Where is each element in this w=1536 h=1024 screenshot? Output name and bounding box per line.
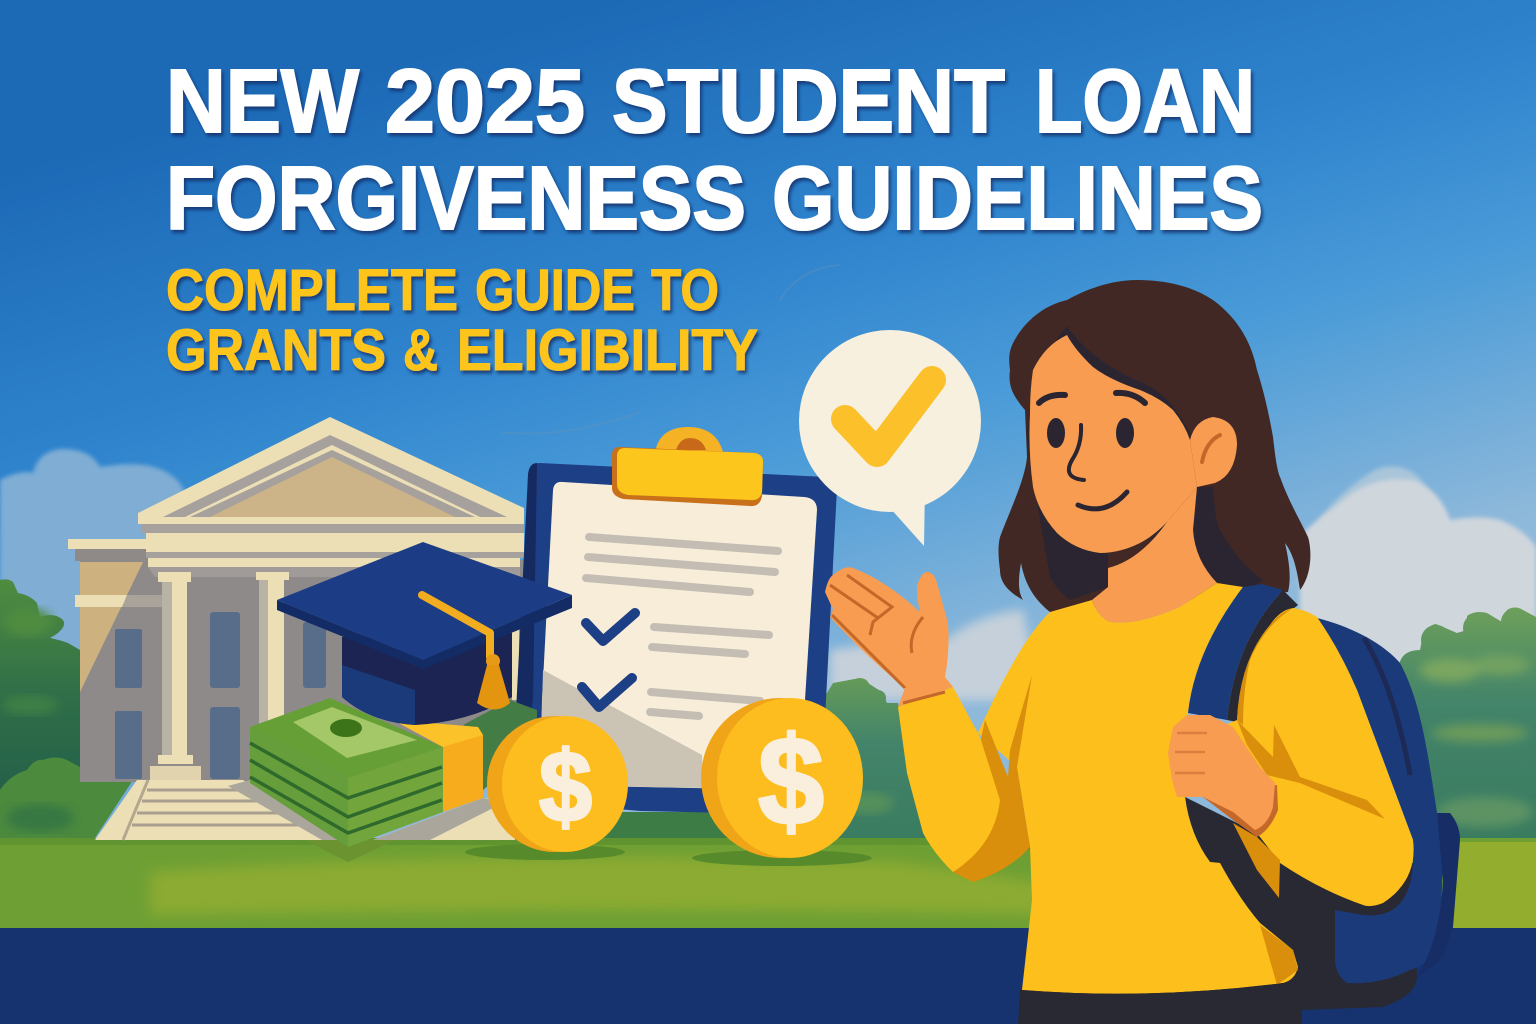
backpack — [1317, 618, 1443, 983]
clouds — [0, 449, 1536, 700]
subtitle: GRANTS — [166, 318, 386, 383]
bottom navy band — [0, 928, 1536, 1024]
hair shadows — [1027, 326, 1195, 540]
title: LOAN — [1035, 52, 1255, 152]
trees — [0, 579, 1536, 845]
sleeve and raised arm — [953, 675, 1032, 882]
cash stack — [250, 698, 537, 862]
document lines — [586, 537, 778, 716]
columns — [150, 572, 519, 780]
student figure — [825, 280, 1460, 1024]
clipboard — [512, 427, 837, 815]
large coin: $ — [758, 712, 824, 851]
sweater arm with folds — [1225, 608, 1414, 906]
grass — [0, 838, 1536, 930]
entablature — [138, 517, 524, 577]
large coin — [692, 698, 872, 866]
small coin: $ — [539, 731, 592, 843]
paper — [540, 482, 817, 790]
left wing — [68, 539, 525, 782]
ear — [1190, 417, 1237, 487]
eyes — [1047, 418, 1134, 448]
title: 2025 — [385, 52, 585, 152]
clipboard clip — [612, 427, 763, 506]
backpack strap — [1188, 584, 1283, 720]
small coin — [465, 716, 628, 860]
face — [1029, 335, 1197, 553]
title: STUDENT — [612, 52, 1005, 152]
neck — [1092, 487, 1217, 623]
title: FORGIVENESS — [166, 149, 746, 249]
windows — [115, 612, 326, 779]
government building — [68, 417, 525, 840]
subtitle: TO — [651, 258, 719, 323]
stairs — [95, 780, 515, 840]
yellow sweater — [978, 583, 1298, 994]
brows, nose, mouth — [1039, 393, 1145, 509]
check marks — [582, 613, 635, 707]
subtitle: COMPLETE — [166, 258, 458, 323]
pediment — [138, 417, 524, 524]
subtitle: GUIDE — [475, 258, 635, 323]
hair — [998, 280, 1310, 612]
subtitle — [166, 258, 758, 383]
subtitle: ELIGIBILITY — [457, 318, 758, 383]
title — [166, 52, 1263, 249]
graduation cap — [277, 542, 572, 725]
subtitle: & — [403, 318, 438, 383]
lower clothing — [1018, 983, 1300, 1024]
title: NEW — [166, 52, 359, 152]
hand on strap — [1203, 785, 1278, 837]
backpack base — [1018, 797, 1417, 1024]
raised hand — [825, 567, 953, 707]
speech bubble with check — [799, 330, 981, 546]
title: GUIDELINES — [772, 149, 1263, 249]
